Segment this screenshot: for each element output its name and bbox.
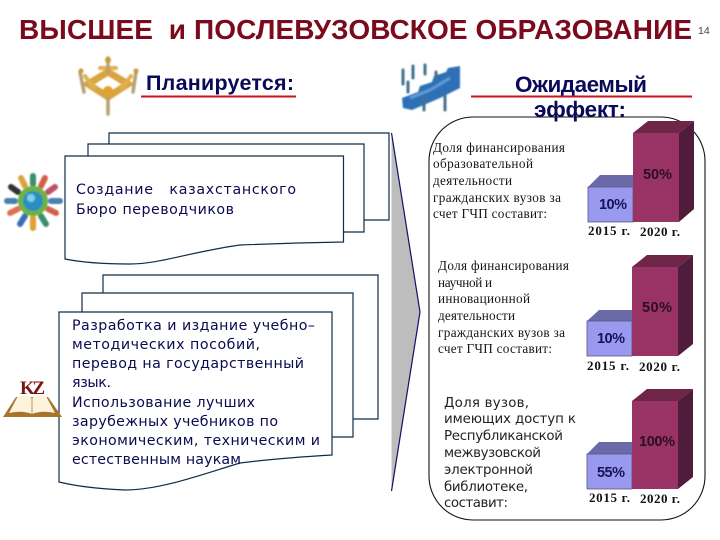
text: textbooks: Использование лучших (72, 395, 255, 411)
bar chart 1: 10% (599, 197, 627, 213)
text: library access: межвузовской (444, 446, 541, 461)
text: textbooks: язык. (72, 375, 111, 391)
heading: expected effect: Ожидаемый (515, 72, 647, 97)
text: textbooks (72, 318, 320, 468)
bar chart 2: 50% (642, 300, 672, 316)
icon: KZ book (3, 378, 62, 417)
text: library access: электронной (444, 463, 533, 478)
bar chart 1: 2020 г. (640, 224, 680, 239)
text: textbooks: перевод на государственный (72, 356, 304, 372)
text: textbooks: Разработка и издание учебно– (72, 318, 315, 334)
text: textbooks: зарубежных учебников по (72, 414, 278, 430)
text: library access: библиотеке, (444, 479, 528, 495)
bar chart 3 (587, 389, 693, 506)
text: translators bureau: Бюро переводчиков (76, 202, 234, 218)
text: educational funding: деятельности (433, 173, 512, 188)
text: research funding: инновационной (438, 291, 530, 306)
bar chart 3: 2015 г. (589, 490, 630, 505)
panel: document stack 2 (59, 275, 378, 490)
text: research funding (438, 258, 569, 356)
icon: blue staircase arrow with figures (402, 65, 460, 110)
text: research funding: счет ГЧП составит: (438, 341, 552, 356)
text: textbooks: методических пособий, (72, 337, 260, 353)
heading: expected effect: эффект: (534, 97, 626, 122)
bar chart 3: 100% (639, 434, 675, 450)
text: library access: имеющих доступ к (444, 412, 576, 427)
text: textbooks: естественным наукам (72, 452, 241, 468)
text: educational funding (433, 140, 565, 221)
bar chart 1: 50% (643, 167, 672, 183)
icon: globe with people (7, 176, 60, 228)
bar chart 3: 55% (597, 465, 625, 481)
text: research funding: научной и (438, 275, 492, 290)
text: translators bureau: Создание казахстанского (76, 182, 296, 198)
icon: golden figures (78, 57, 138, 114)
text: library access: Доля вузов, (444, 396, 529, 411)
bar chart 2 (587, 255, 693, 374)
bar chart 2: 10% (597, 331, 625, 347)
text: educational funding: гражданских вузов за (433, 190, 561, 205)
text: educational funding: образовательной (433, 156, 533, 171)
text: library access: Республиканской (444, 428, 563, 444)
text: research funding: деятельности (438, 308, 515, 323)
text: library access: составит: (444, 496, 508, 511)
heading: expected effect (471, 72, 692, 122)
text: textbooks: экономическим, техническим и (72, 433, 320, 449)
heading: planned: Планируется: (146, 71, 294, 95)
text: educational funding: счет ГЧП составит: (433, 206, 547, 221)
bar chart 1 (588, 121, 694, 239)
text: educational funding: Доля финансирования (433, 140, 565, 155)
text: research funding: Доля финансирования (438, 258, 569, 273)
bar chart 2: 2015 г. (587, 358, 629, 373)
bar chart 3: 2020 г. (640, 491, 680, 506)
page number: 14 (698, 25, 710, 37)
bar chart 2: 2020 г. (639, 359, 680, 374)
bar chart 1: 2015 г. (588, 223, 630, 238)
panel: expected effect (429, 117, 705, 520)
text: translators bureau (76, 182, 296, 218)
panel: document stack 1 (65, 133, 389, 264)
text: library access (444, 396, 576, 511)
title: ВЫСШЕЕ и ПОСЛЕВУЗОВСКОЕ ОБРАЗОВАНИЕ (19, 14, 692, 45)
arrow (392, 133, 420, 491)
icon: KZ book: KZ (20, 378, 45, 399)
text: research funding: гражданских вузов за (438, 325, 565, 340)
